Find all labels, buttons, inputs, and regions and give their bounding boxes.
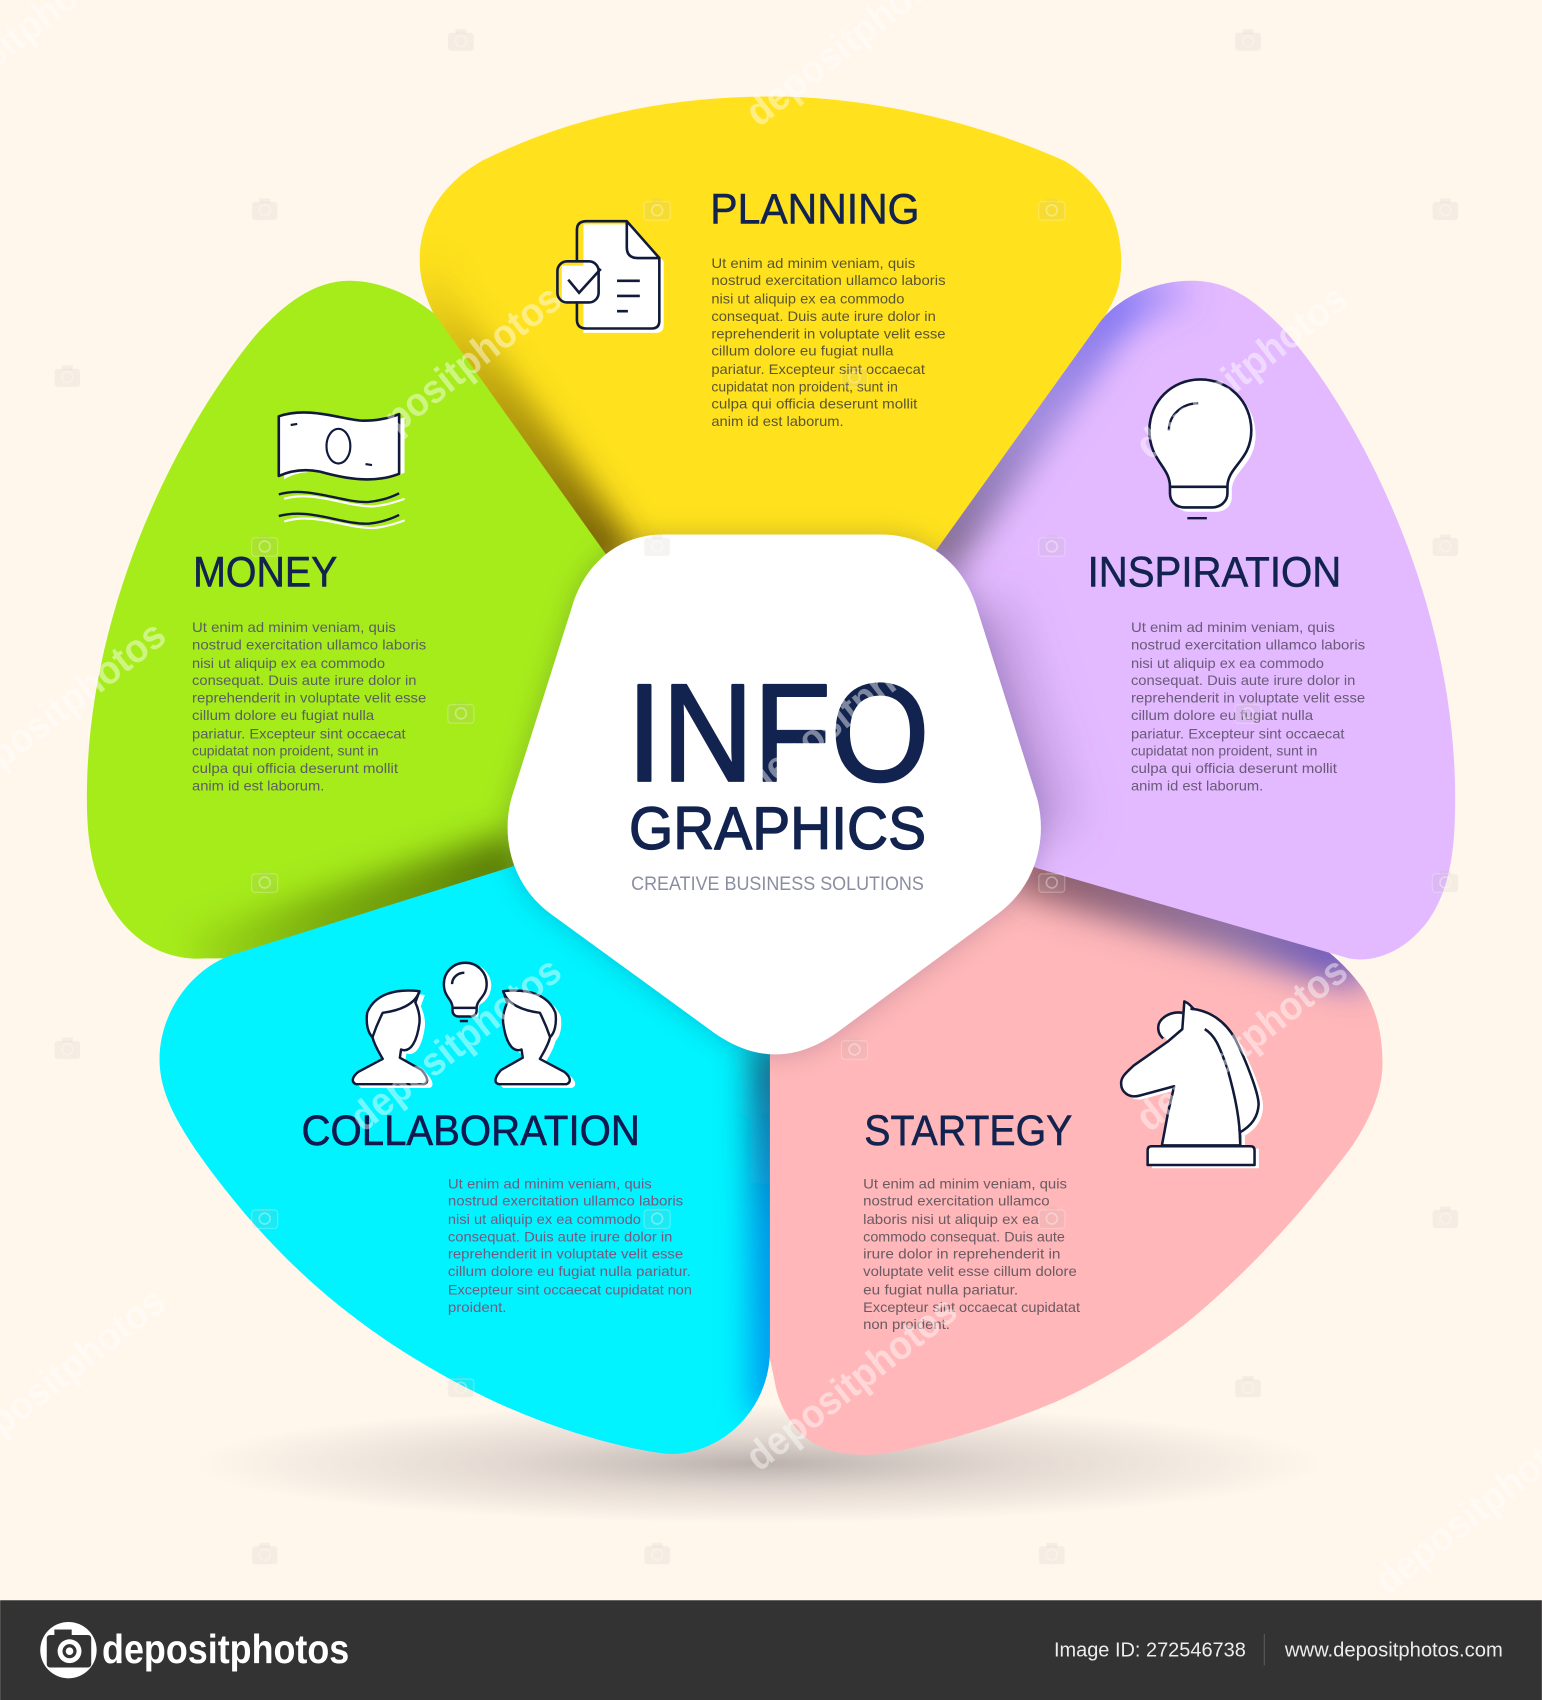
text block: inspiration: nisi ut aliquip ex ea commodo [1131, 655, 1324, 671]
watermarks: depositphotos [738, 1288, 965, 1479]
text block: inspiration: culpa qui officia deserunt mollit [1131, 760, 1337, 776]
watermarks: depositphotos [342, 949, 570, 1140]
text block: inspiration: nostrud exercitation ullamco laboris [1131, 636, 1365, 652]
panel: inspiration petal [936, 280, 1456, 960]
panel: planning petal [420, 96, 1122, 554]
text block: collaboration: Excepteur sint occaecat cupidatat non [448, 1282, 692, 1298]
text block: inspiration: cupidatat non proident, sunt in [1131, 743, 1317, 759]
heading: inspiration: INSPIRATION [1088, 549, 1341, 596]
text block: money: cillum dolore eu fugiat nulla [192, 707, 374, 723]
text block: inspiration [1131, 619, 1365, 793]
text block: strategy: Ut enim ad minim veniam, quis [863, 1175, 1067, 1191]
text block: strategy: irure dolor in reprehenderit in [863, 1246, 1060, 1262]
footer url: www.depositphotos.com [1284, 1639, 1503, 1662]
panel: money petal [86, 280, 606, 959]
footer bar [0, 1600, 1542, 1700]
text block: planning: culpa qui officia deserunt mollit [711, 396, 917, 412]
text block: inspiration: anim id est laborum. [1131, 777, 1263, 793]
subtitle: CREATIVE BUSINESS SOLUTIONS [631, 873, 924, 895]
text block: money: consequat. Duis aute irure dolor in [192, 672, 416, 688]
icon: right head [496, 990, 575, 1088]
text block: planning [711, 255, 946, 429]
icon: light bulb [1149, 379, 1256, 518]
panel: collaboration petal [160, 866, 770, 1454]
text block: strategy: voluptate velit esse cillum dolore [863, 1263, 1077, 1279]
text block: money: anim id est laborum. [192, 777, 324, 793]
text block: collaboration [448, 1175, 692, 1315]
text block: inspiration: cillum dolore eu fugiat nulla [1131, 707, 1313, 723]
text block: planning: cupidatat non proident, sunt in [711, 378, 898, 394]
text block: planning: reprehenderit in voluptate velit esse [711, 325, 946, 341]
icon: small bulb [444, 963, 491, 1021]
ground shadow [195, 1404, 1323, 1523]
icon: left head [353, 990, 433, 1088]
text block: planning: pariatur. Excepteur sint occaecat [711, 361, 925, 377]
text block: collaboration: nisi ut aliquip ex ea commodo [448, 1211, 641, 1227]
icon: chess knight [1121, 1001, 1263, 1168]
text block: planning: consequat. Duis aute irure dolor in [711, 308, 936, 324]
text block: strategy: commodo consequat. Duis aute [863, 1228, 1065, 1244]
text block: money [192, 619, 426, 793]
icon: footer camera logo [40, 1622, 97, 1678]
heading: strategy: STARTEGY [864, 1107, 1072, 1154]
text block: money: culpa qui officia deserunt mollit [192, 760, 398, 776]
footer brand: depositphotos [102, 1626, 349, 1672]
panel: center pentagon title [508, 535, 1041, 1054]
text block: planning: nostrud exercitation ullamco laboris [711, 272, 946, 288]
text block: money: Ut enim ad minim veniam, quis [192, 619, 396, 635]
watermarks: depositphotos [738, 612, 965, 804]
icon: two heads and light bulb [353, 963, 575, 1088]
text block: planning: nisi ut aliquip ex ea commodo [711, 291, 905, 307]
heading: money: MONEY [193, 549, 337, 596]
text block: strategy [863, 1175, 1080, 1332]
text block: strategy: laboris nisi ut aliquip ex ea [863, 1211, 1039, 1227]
text block: inspiration: reprehenderit in voluptate velit esse [1131, 690, 1365, 706]
text block: planning: anim id est laborum. [711, 413, 844, 429]
text block: strategy: Excepteur sint occaecat cupidatat [863, 1299, 1080, 1315]
watermarks: depositphotos [1128, 949, 1356, 1140]
text block: planning: Ut enim ad minim veniam, quis [711, 255, 915, 271]
text block: strategy: nostrud exercitation ullamco [863, 1193, 1050, 1209]
text block: money: reprehenderit in voluptate velit esse [192, 690, 426, 706]
text block: collaboration: nostrud exercitation ullamco laboris [448, 1193, 683, 1209]
text block: inspiration: consequat. Duis aute irure dolor in [1131, 672, 1355, 688]
watermarks: depositphotos [342, 276, 570, 468]
panel: strategy petal [770, 866, 1382, 1455]
text block: collaboration: reprehenderit in voluptate velit esse [448, 1246, 683, 1262]
text block: inspiration: pariatur. Excepteur sint occaecat [1131, 725, 1345, 741]
icon: banknote [279, 412, 405, 528]
text block: money: nostrud exercitation ullamco laboris [192, 636, 426, 652]
text block: money: nisi ut aliquip ex ea commodo [192, 655, 385, 671]
text block: strategy: eu fugiat nulla pariatur. [863, 1282, 1018, 1298]
text block: collaboration: cillum dolore eu fugiat nulla pariatur. [448, 1263, 691, 1279]
title: GRAPHICS: GRAPHICS [629, 794, 926, 862]
heading: collaboration: COLLABORATION [302, 1107, 640, 1154]
text block: collaboration: Ut enim ad minim veniam, quis [448, 1175, 652, 1191]
text block: inspiration: Ut enim ad minim veniam, quis [1131, 619, 1335, 635]
icon: document with checkmark [557, 221, 664, 333]
footer image id: Image ID: 272546738 [1054, 1639, 1246, 1662]
watermarks: depositphotos [1128, 276, 1356, 468]
text block: planning: cillum dolore eu fugiat nulla [711, 343, 894, 359]
title: INFO: INFO [627, 656, 929, 811]
text block: strategy: non proident. [863, 1316, 950, 1332]
text block: money: cupidatat non proident, sunt in [192, 743, 379, 759]
text block: collaboration: consequat. Duis aute irure dolor in [448, 1228, 672, 1244]
heading: planning: PLANNING [710, 185, 920, 232]
text block: collaboration: proident. [448, 1299, 506, 1315]
text block: money: pariatur. Excepteur sint occaecat [192, 725, 406, 741]
